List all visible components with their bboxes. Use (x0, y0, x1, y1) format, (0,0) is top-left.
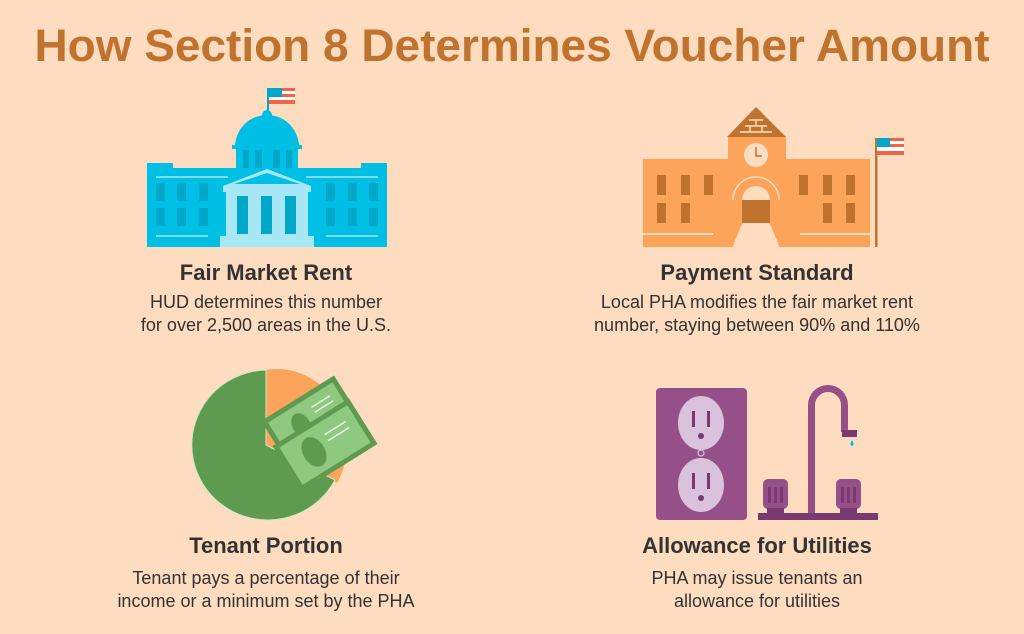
icon: electrical outlet (656, 388, 747, 520)
icon: pie chart with money (192, 369, 377, 520)
text: tenant portion description: income or a minimum set by the PHA (117, 591, 415, 611)
heading: fair market rent: Fair Market Rent (180, 260, 353, 285)
text: utilities description: PHA may issue tenants an (651, 568, 863, 588)
text: utilities description: allowance for utilities (674, 591, 840, 611)
heading: payment standard: Payment Standard (660, 260, 854, 285)
heading: tenant portion: Tenant Portion (189, 533, 343, 558)
text: payment standard description: Local PHA modifies the fair market rent (601, 292, 913, 312)
text: tenant portion description: Tenant pays a percentage of their (132, 568, 400, 588)
icon: faucet (758, 385, 878, 520)
icon: capitol building (147, 88, 387, 247)
text: fair market rent description: for over 2,500 areas in the U.S. (141, 315, 391, 335)
title: How Section 8 Determines Voucher Amount (34, 20, 990, 71)
text: fair market rent description: HUD determines this number (150, 292, 382, 312)
heading: allowance for utilities: Allowance for Utilities (642, 533, 872, 558)
text: payment standard description: number, staying between 90% and 110% (594, 315, 920, 335)
icon: school building (643, 107, 904, 247)
